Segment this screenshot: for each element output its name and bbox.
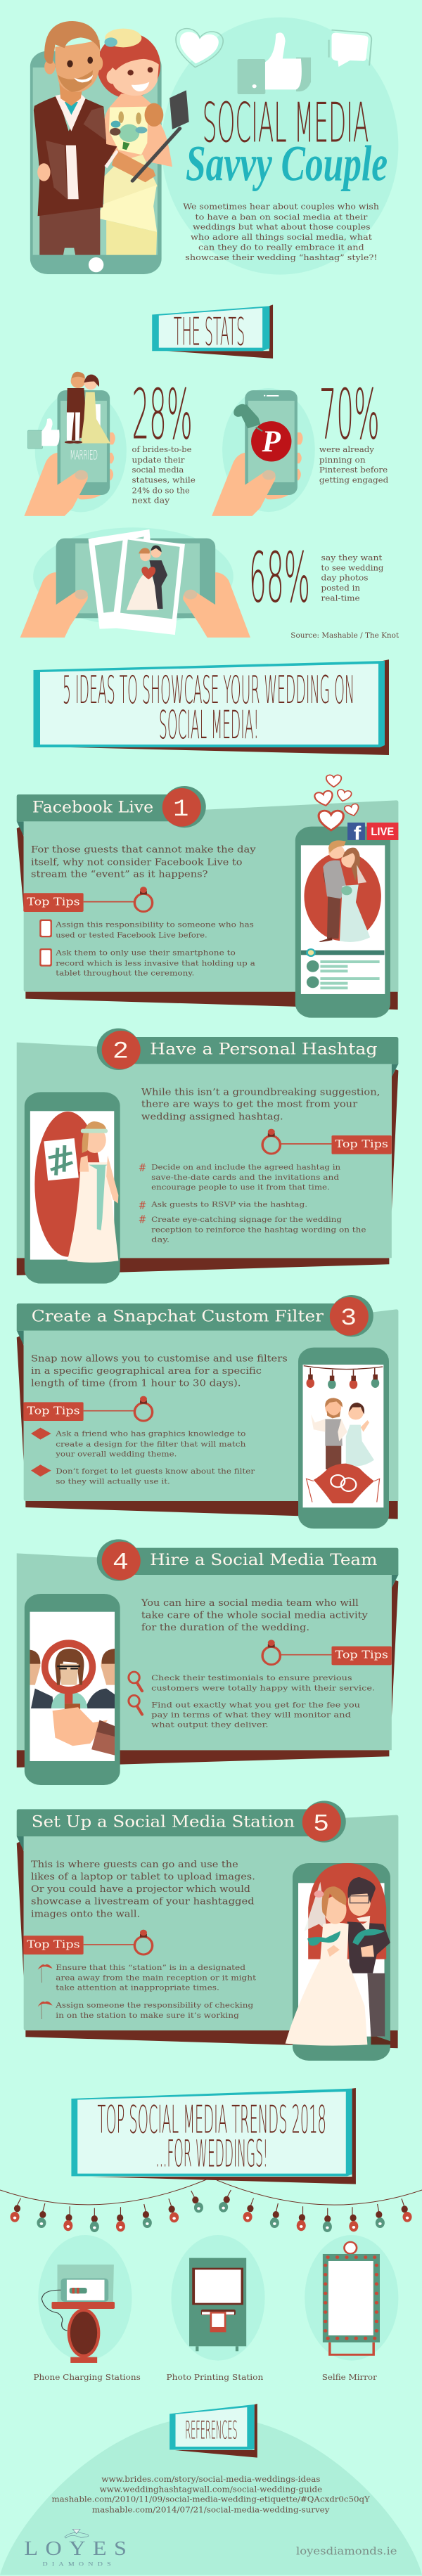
tip list: Ask guests to RSVP via the hashtag. [151,1199,307,1209]
tip list: pay in terms of what they will monitor and [151,1710,351,1719]
intro text: to have a ban on social media at their [195,212,367,221]
icon: speech bubble [329,30,371,67]
reference list: mashable.com/2014/07/21/social-media-wedding-survey [92,2505,330,2514]
icon: floating hearts [314,775,361,830]
intro text: Or you could have a projector which would [31,1884,250,1895]
phone: couple with photo props [286,1863,390,2061]
tip list: your overall wedding theme. [55,1449,177,1458]
caption: day photos [321,573,369,583]
reference list [51,2475,370,2514]
caption: to see wedding [321,563,383,573]
top tips label [23,1930,153,1954]
illustration: hand holding phone with couple [24,372,127,516]
stats section: THE STATS [174,309,245,354]
tip list: # [139,1199,146,1211]
stat: 68% [20,527,383,638]
heading [17,1801,346,1843]
trend labels: Phone Charging Stations [33,2373,141,2382]
tip list: Assign this responsibility to someone who has [55,920,254,929]
intro text: length of time (from 1 hour to 30 days). [31,1379,241,1389]
intro text [31,1354,288,1389]
reference list: mashable.com/2010/11/09/social-media-wedding-etiquette/#QAcxdr0c50qY [51,2494,370,2504]
banner: references [170,2404,257,2458]
stat: 70% [212,375,388,516]
heading: 5 [313,1810,329,1838]
intro text: You can hire a social media team who will [141,1598,359,1609]
tip list [139,1161,366,1244]
logo: Loyes Diamonds: DIAMONDS [42,2561,111,2568]
tip list [39,920,255,977]
tip list: what output they deliver. [151,1720,269,1729]
reference list: www.brides.com/story/social-media-weddings-ideas [101,2475,320,2484]
phone body [30,51,162,274]
stats section: 28% [132,375,193,456]
tip list: Don’t forget to let guests know about the filter [56,1467,255,1476]
intro text: who adore all things social media, what [191,233,372,242]
tip list: # [139,1161,146,1174]
top tips label: Top Tips [335,1649,388,1661]
tip list [31,1428,255,1486]
tip list: customers were totally happy with their service. [151,1683,375,1692]
intro text: stream the “event” as it happens? [31,869,207,880]
logo: Loyes Diamonds: LOYES [24,2537,127,2559]
tip list: Create eye-catching signage for the wedding [151,1215,342,1224]
top tips label [23,887,153,912]
caption [321,553,383,603]
tip list: area away from the main reception or it might [56,1973,256,1982]
icon: heart [172,27,224,70]
caption: pinning on [319,455,366,465]
heading: 3 [340,1305,357,1332]
caption: 24% do so the [132,485,190,495]
icon: Facebook Live badge: LIVE [371,826,394,838]
intro text: in a specific geographical area for a specific [31,1366,262,1377]
icon: Facebook Live badge: f [354,823,362,844]
stat: 68%: 68% [249,539,310,619]
caption [319,444,388,485]
intro text: This is where guests can go and use the [31,1860,238,1870]
heading: Have a Personal Hashtag [150,1040,378,1058]
intro text [31,844,256,880]
tip list: day. [151,1235,170,1244]
illustration: hands holding phone with polaroids [20,527,250,638]
heading [17,1295,373,1337]
intro text: weddings but what about those couples [193,222,371,231]
caption: statuses, while [132,475,196,485]
tip list: Ensure that this “station” is in a designated [56,1963,245,1972]
tip list: record which is less invasive that holding up a [56,958,255,967]
illustration: hand holding phone with couple: MARRIED [70,448,98,463]
illustration: hand with phone and Pinterest pin [212,388,315,516]
bride figure [96,29,172,255]
intro text: images onto the wall. [31,1910,140,1919]
heading: 1 [173,796,188,823]
top tips label: Top Tips [335,1138,388,1150]
website: loyesdiamonds.ie [296,2544,397,2557]
tip list: encourage people to use it from that time. [151,1183,330,1192]
intro text [141,1598,368,1633]
banner: The Stats [152,304,273,359]
caption: social media [132,465,184,475]
tip list: Ask a friend who has graphics knowledge to [55,1429,246,1438]
panel: Facebook Live [17,775,398,1018]
intro text: showcase their wedding “hashtag” style?! [185,253,378,262]
heading: Hire a Social Media Team [150,1551,378,1569]
tip list: Check their testimonials to ensure previous [151,1673,352,1682]
tip list: in on the station to make sure it’s working [56,2011,239,2020]
tip list: Decide on and include the agreed hashtag in [151,1162,341,1171]
panel: Social Media Team [17,1539,398,1785]
heading: Create a Snapchat Custom Filter [32,1307,324,1325]
caption: Pinterest before [319,465,388,475]
tip list: take attention at inappropriate times. [56,1983,219,1992]
tip list: save-the-date cards and the invitations and [151,1173,339,1182]
heading: 4 [113,1549,129,1576]
stats section [20,304,399,640]
heading [97,1539,398,1581]
tip list [38,1963,256,2020]
intro text: We sometimes hear about couples who wish [183,202,379,211]
panel: Snapchat Custom Filter [17,1295,398,1528]
tip list: # [139,1213,146,1225]
banner: top social media trends [71,2088,356,2184]
intro text: Snap now allows you to customise and use filters [31,1354,288,1364]
phone: Facebook Live stream [295,827,390,1018]
intro text: wedding assigned hashtag. [141,1112,283,1122]
intro text: likes of a laptop or tablet to upload images. [31,1872,255,1882]
heading [97,1029,398,1070]
stat: 28% [24,372,196,516]
logo: Loyes Diamonds [24,2529,127,2568]
tip list: Assign someone the responsibility of checking [55,2000,253,2009]
caption: update their [132,455,185,465]
caption: were already [319,444,374,454]
phone with couple taking a selfie [30,21,189,274]
references and footer [0,2404,422,2575]
footer background dome [0,2416,422,2575]
phone: couple with lights and rings [298,1348,389,1528]
caption [132,444,196,505]
intro text: itself, why not consider Facebook Live to [31,857,242,868]
trend labels [33,2373,377,2382]
phone: magnifier over candidates [25,1594,120,1785]
top tips label: Top Tips [27,1405,80,1417]
caption: real-time [321,593,360,603]
hero background circle [162,18,398,275]
tip list: tablet throughout the ceremony. [56,968,194,977]
groom figure [34,21,163,255]
top tips label: Top Tips [27,895,80,908]
intro text [183,202,379,262]
banner: 5 ideas [34,659,389,755]
icon: selfie mirror [305,2235,398,2361]
intro text: While this isn’t a groundbreaking suggestion, [141,1087,380,1097]
trend labels: Photo Printing Station [167,2373,264,2382]
panel: Social Media Station [17,1801,398,2061]
caption: say they want [321,553,383,562]
heading: Set Up a Social Media Station [32,1812,295,1831]
icon: thumbs up [238,32,311,94]
illustration: hand with phone and Pinterest pin: P [262,425,281,458]
heading: Facebook Live [32,798,153,816]
top tips label [262,1129,392,1154]
caption: getting engaged [319,475,388,485]
intro text: take care of the whole social media activity [141,1610,368,1621]
intro text [31,1860,255,1919]
top tips label [262,1640,392,1665]
heading [17,786,206,827]
tip list: create a design for the filter that will match [56,1439,246,1448]
top tips label [23,1396,153,1421]
intro text: showcase a livestream of your hashtagged [31,1897,255,1907]
source note: Source: Mashable / The Knot [290,631,399,640]
intro text [141,1087,380,1122]
tip list: Ask them to only use their smartphone to [55,948,236,957]
references and footer: REFERENCES [185,2416,238,2445]
icon: phone charging station [38,2235,132,2363]
trends icons and labels [33,2235,398,2382]
tip list: so they will actually use it. [56,1476,170,1486]
tip list: Find out exactly what you get for the fee you [151,1700,360,1709]
intro text: can they do to really embrace it and [198,243,364,252]
caption: next day [132,495,170,505]
tip list: used or tested Facebook Live before. [56,930,207,939]
phone: bride with hashtag sign [25,1092,120,1284]
caption: posted in [321,583,361,593]
intro text: For those guests that cannot make the day [31,844,256,855]
string lights [0,2179,422,2232]
heading: 2 [113,1038,129,1065]
tip list [129,1672,375,1729]
icon: Facebook Live badge [347,823,398,844]
selfie stick [132,90,189,181]
tip list: reception to reinforce the hashtag wording on the [151,1225,366,1234]
panel: Personal Hashtag [17,1029,398,1284]
caption: of brides-to-be [132,444,192,454]
intro text: there are ways to get the most from your [141,1100,358,1109]
icon: photo printing station [171,2235,265,2361]
trend labels: Selfie Mirror [322,2373,377,2382]
intro text: for the duration of the wedding. [141,1623,309,1633]
top tips label: Top Tips [27,1938,80,1950]
hero section [30,18,398,275]
reference list: www.weddinghashtagwall.com/social-wedding-guide [100,2485,322,2494]
